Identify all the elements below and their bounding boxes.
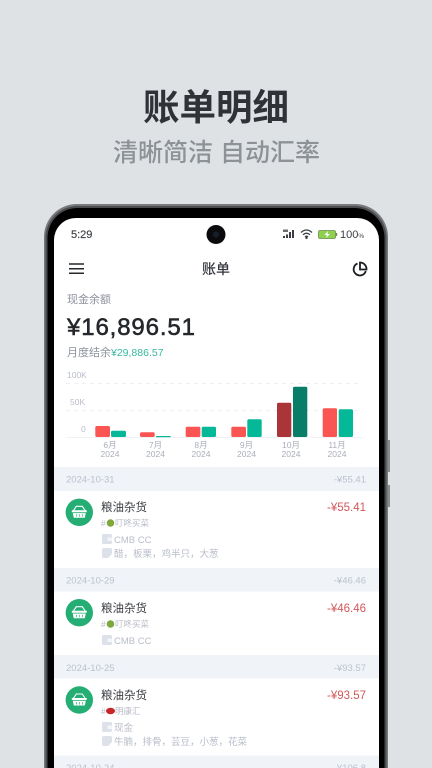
tag: 叮咚买菜 <box>115 619 150 629</box>
bars: September <box>231 419 262 437</box>
transaction amount: -¥55.41 <box>327 502 366 514</box>
transaction title: 粮油杂货 <box>101 500 147 514</box>
balance amount: ¥16,896.51 <box>66 314 195 341</box>
camera <box>206 225 226 244</box>
bars: October <box>277 387 307 437</box>
month labels: 11月 <box>328 440 346 450</box>
month labels: 7月 <box>149 440 162 450</box>
note <box>102 548 218 558</box>
month labels: 2024 <box>328 449 347 459</box>
month labels: 9月 <box>240 440 253 450</box>
icon: wifi <box>301 230 312 238</box>
axis labels <box>68 372 86 432</box>
axis labels: 0 <box>81 424 86 434</box>
monthly surplus: 月度结余¥29,886.57 <box>67 345 164 359</box>
icon: battery <box>318 230 337 238</box>
subtitle: 清晰简洁 自动汇率 <box>113 139 320 167</box>
tag <box>101 706 141 716</box>
month labels: 8月 <box>194 440 208 450</box>
month labels: 2024 <box>146 449 165 459</box>
balance summary <box>66 292 195 359</box>
page title: 账单 <box>202 261 230 277</box>
title: 账单明细 <box>143 87 289 128</box>
bars: August <box>186 427 216 437</box>
month labels: 10月 <box>282 440 300 450</box>
axis labels: 50K <box>70 397 85 407</box>
date header 10-25: 2024-10-25 <box>66 663 115 674</box>
tag <box>101 518 148 527</box>
date header 10-31: -¥55.41 <box>334 474 366 486</box>
date header 10-29: 2024-10-29 <box>66 576 115 586</box>
phone frame <box>44 204 390 768</box>
status bar <box>71 225 364 244</box>
account: CMB CC <box>114 535 152 546</box>
account <box>102 534 151 544</box>
status time: 5:29 <box>71 229 92 241</box>
month labels: 6月 <box>103 440 117 450</box>
month labels: 2024 <box>282 449 301 459</box>
transaction 10-29 <box>66 599 366 647</box>
transaction 10-31 <box>66 499 366 560</box>
icon: basket <box>66 599 93 626</box>
tag <box>101 620 148 628</box>
account: CMB CC <box>114 636 152 647</box>
icon: basket <box>66 499 93 526</box>
date header 10-25: -¥93.57 <box>334 663 366 674</box>
account: 现金 <box>114 722 134 734</box>
tag: 明康汇 <box>115 706 141 716</box>
app screen <box>54 225 379 768</box>
icon: basket <box>66 686 93 714</box>
note: 牛腩，排骨，芸豆，小葱，花菜 <box>114 736 248 748</box>
balance label: 现金余额 <box>67 292 111 306</box>
note: 醋，板栗，鸡半只，大葱 <box>114 548 219 560</box>
tag: # <box>101 706 106 716</box>
tag: # <box>101 619 106 629</box>
account <box>102 722 134 734</box>
bars: November <box>323 408 353 437</box>
transaction amount: -¥93.57 <box>327 690 366 702</box>
transaction title: 粮油杂货 <box>101 688 147 702</box>
icon: signal <box>283 230 294 238</box>
month labels <box>100 441 346 457</box>
month labels: 2024 <box>237 449 256 459</box>
transaction amount: -¥46.46 <box>327 603 366 615</box>
account <box>102 635 151 645</box>
date header 10-29: -¥46.46 <box>334 576 366 586</box>
month labels: 2024 <box>192 449 211 459</box>
date header 10-25 <box>54 655 379 678</box>
transaction title: 粮油杂货 <box>101 601 147 615</box>
battery percent: 100% <box>340 229 364 241</box>
date header 10-29 <box>54 568 379 592</box>
icon: pie chart <box>354 262 367 275</box>
axis labels: 100K <box>67 370 87 380</box>
bars: June <box>95 426 126 437</box>
bar chart <box>66 370 363 459</box>
date header 10-24 <box>54 756 379 768</box>
date header 10-31 <box>54 467 379 491</box>
month labels: 2024 <box>101 449 120 459</box>
bars: July <box>140 432 171 437</box>
tag: # <box>101 518 106 528</box>
transaction 10-25 <box>66 686 366 748</box>
tag: 叮咚买菜 <box>115 518 150 528</box>
date header 10-31: 2024-10-31 <box>66 474 115 486</box>
icon: menu <box>69 264 84 273</box>
